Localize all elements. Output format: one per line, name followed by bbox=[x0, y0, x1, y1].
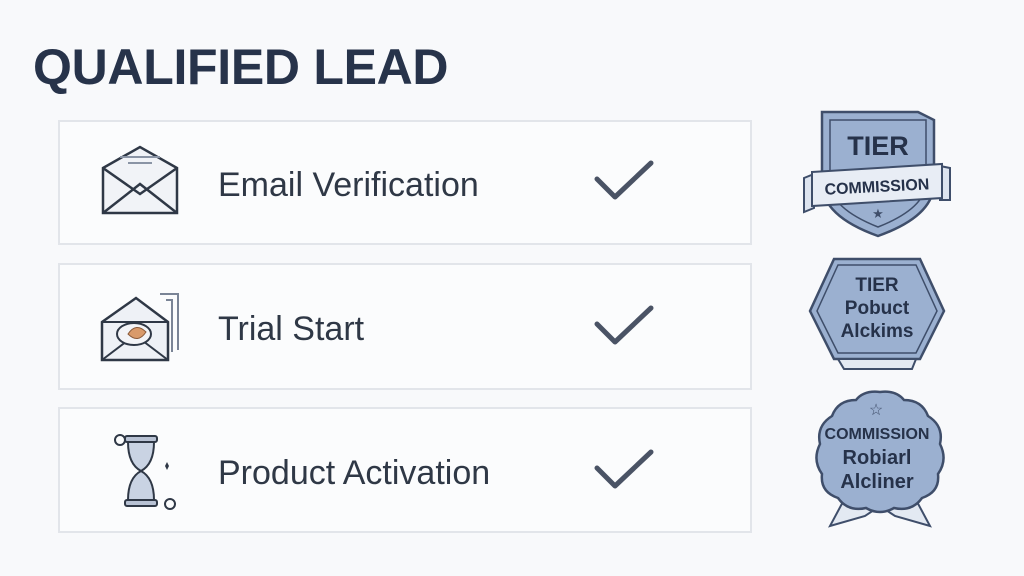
label: Product Activation bbox=[218, 454, 490, 492]
badge: hexagon: TIER bbox=[855, 275, 899, 296]
badge: tier commission shield: TIER bbox=[847, 131, 909, 161]
badge: hexagon: Alckims bbox=[841, 321, 913, 342]
label: Trial Start bbox=[218, 310, 364, 348]
panel: email verification bbox=[58, 120, 752, 245]
title: QUALIFIED LEAD bbox=[33, 39, 448, 95]
icon: envelope bbox=[102, 146, 178, 214]
icon: hourglass bbox=[114, 434, 176, 510]
icon: checkmark bbox=[594, 160, 654, 200]
badge: rosette: Alcliner bbox=[840, 471, 914, 493]
label: Email Verification bbox=[218, 166, 479, 204]
icon: checkmark bbox=[594, 450, 654, 488]
badge: rosette: Robiarl bbox=[843, 447, 911, 469]
badge: rosette: ☆ bbox=[869, 402, 883, 419]
badge: rosette: COMMISSION bbox=[825, 426, 929, 443]
badge: hexagon: Pobuct bbox=[845, 298, 910, 319]
icon: checkmark bbox=[594, 306, 654, 344]
badge: tier commission shield: ★ bbox=[872, 206, 884, 221]
panel: trial start bbox=[58, 263, 752, 390]
panel: product activation bbox=[58, 407, 752, 533]
badge: tier commission shield: COMMISSION bbox=[824, 176, 930, 199]
badge: hexagon bbox=[808, 258, 946, 370]
badge: rosette bbox=[815, 390, 945, 528]
icon: envelope with seal bbox=[100, 293, 179, 362]
badge: tier commission shield bbox=[803, 110, 951, 238]
